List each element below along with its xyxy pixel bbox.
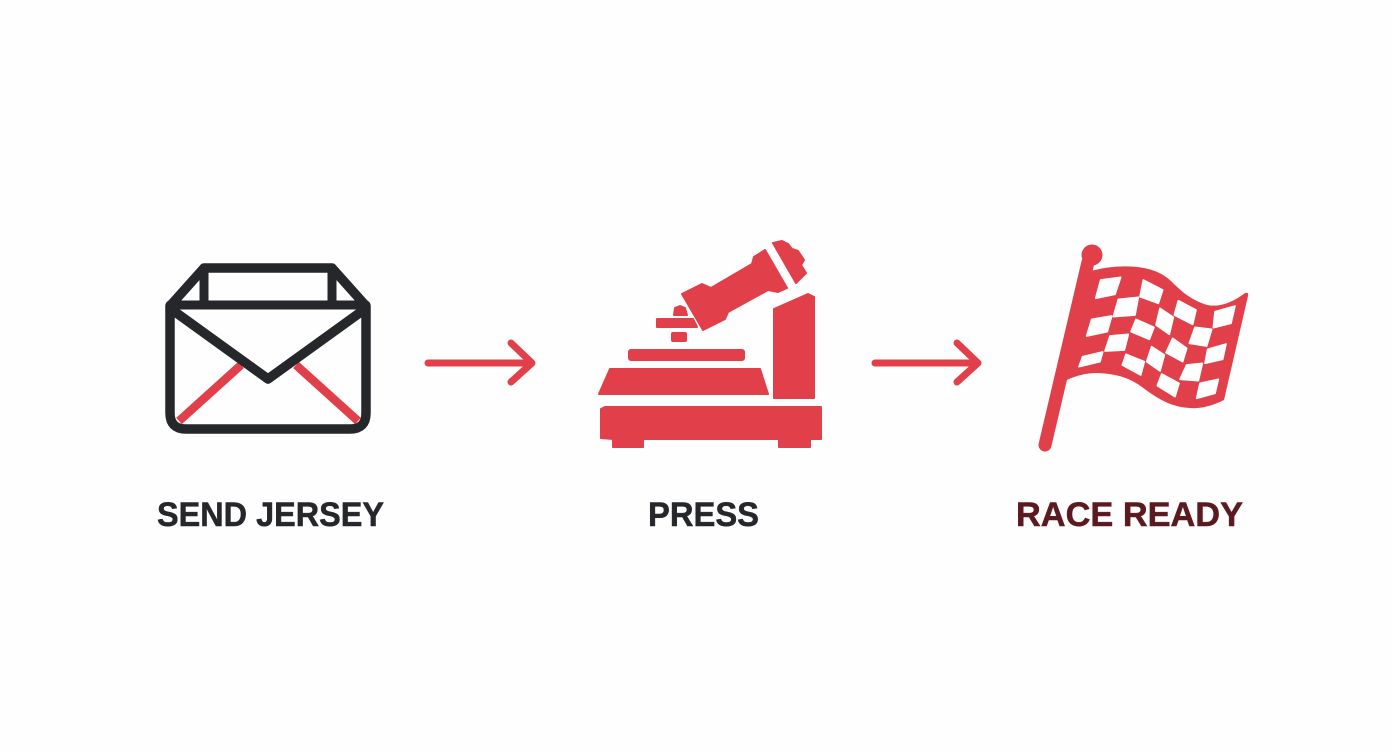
- label: race ready: RACE READY: [1016, 496, 1243, 534]
- arrow: send jersey to press: [428, 343, 532, 382]
- icon: heat press: [599, 241, 821, 447]
- icon: checkered flag: [1045, 244, 1248, 445]
- label: press: PRESS: [648, 496, 759, 534]
- icon: envelope: [170, 268, 366, 429]
- arrow: press to race ready: [875, 343, 978, 382]
- label: send jersey: SEND JERSEY: [157, 496, 384, 534]
